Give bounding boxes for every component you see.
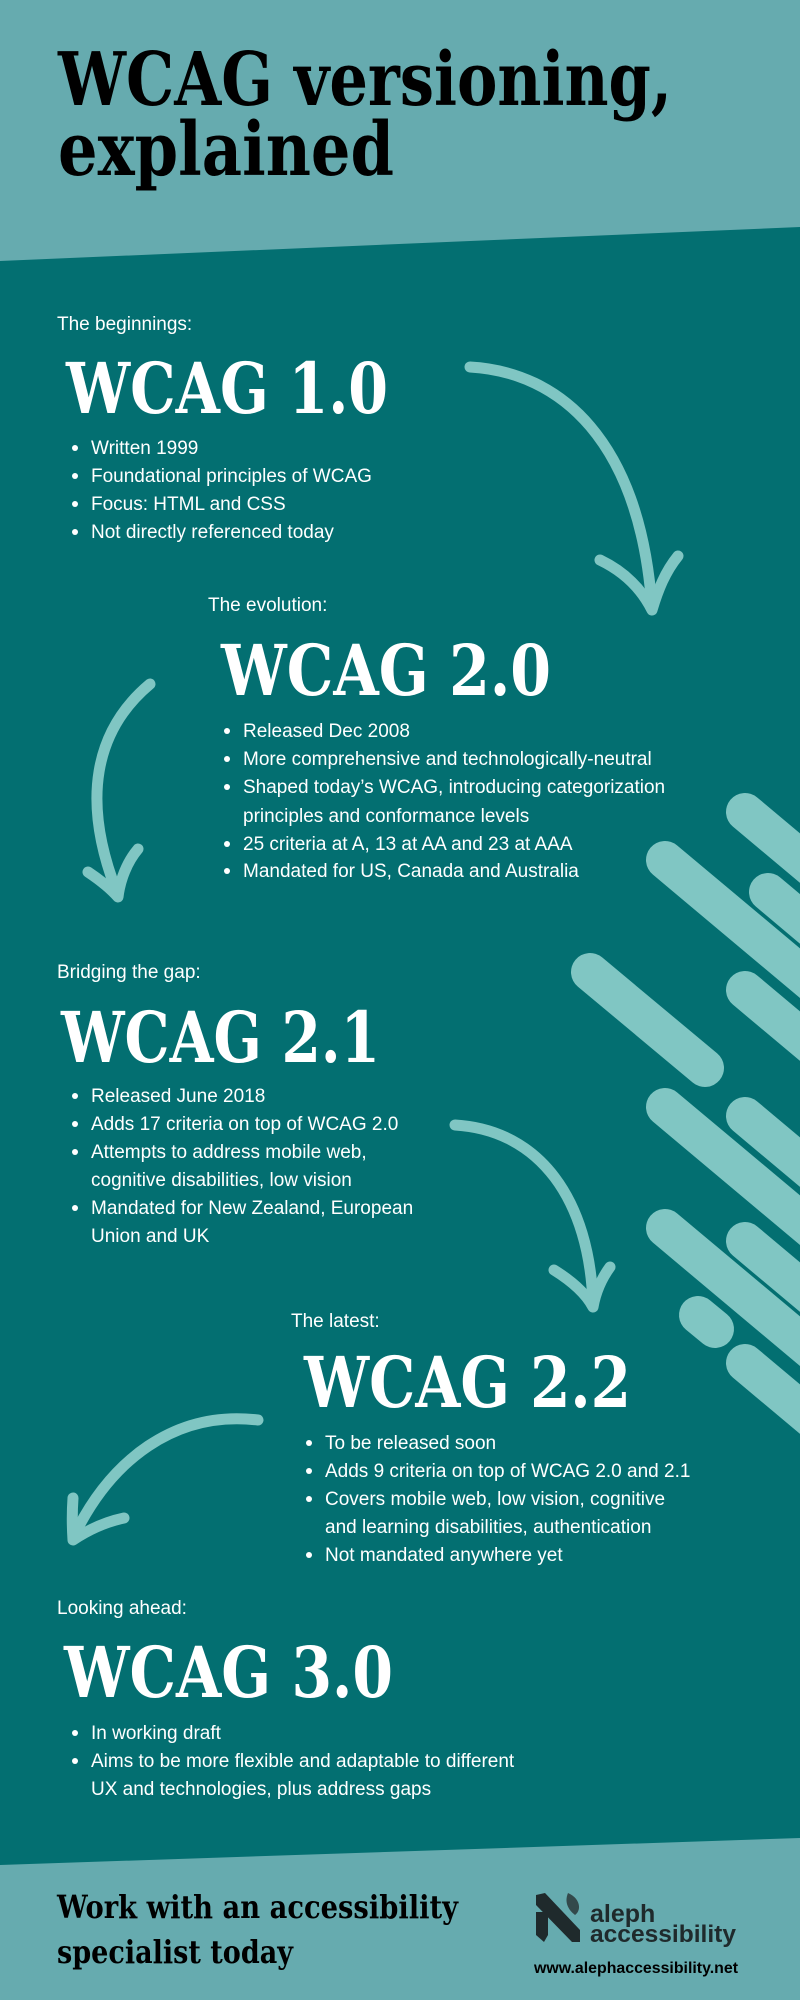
section: WCAG 2.2: WCAG 2.2 [303,1341,631,1424]
section: WCAG 2.2: The latest: [291,1311,380,1332]
section: WCAG 2.1: WCAG 2.1 [60,996,380,1079]
section: WCAG 2.0: More comprehensive and technologically-neutral [243,749,652,770]
section: WCAG 3.0: Aims to be more flexible and adaptable to different [91,1751,515,1772]
section: WCAG 2.0: principles and conformance levels [243,806,529,827]
section: WCAG 2.0: Released Dec 2008 [243,721,410,742]
arrow: 2.1 to 2.2 [455,1125,610,1307]
section: WCAG 2.0 [208,595,665,882]
logo [533,1893,739,1977]
section: WCAG 2.1: Mandated for New Zealand, European [91,1198,413,1219]
section: WCAG 2.1: Adds 17 criteria on top of WCAG 2.0 [91,1114,398,1135]
section: WCAG 2.1: cognitive disabilities, low vision [91,1170,352,1191]
footer band [0,1838,800,2000]
decorative stripes [590,812,800,1493]
section: WCAG 2.2: and learning disabilities, authentication [325,1517,651,1538]
section: WCAG 2.2: Not mandated anywhere yet [325,1545,563,1566]
section: WCAG 2.1: Released June 2018 [91,1086,265,1107]
section: WCAG 1.0: Foundational principles of WCAG [91,466,372,487]
icon: aleph mark [536,1893,580,1942]
arrow: 2.2 to 3.0 [72,1419,258,1540]
title: WCAG versioning, [57,37,672,123]
section: WCAG 1.0: The beginnings: [57,314,192,335]
section: WCAG 3.0 [57,1598,515,1800]
logo: aleph [590,1900,655,1928]
footer call to action [56,1888,459,1971]
section: WCAG 2.0: Mandated for US, Canada and Australia [243,861,579,882]
section: WCAG 2.0: Shaped today’s WCAG, introducing categorization [243,777,665,798]
section: WCAG 1.0: Written 1999 [91,438,198,459]
section: WCAG 2.1: Attempts to address mobile web, [91,1142,367,1163]
section: WCAG 2.2: Covers mobile web, low vision, cognitive [325,1489,665,1510]
section: WCAG 1.0 [57,314,388,543]
footer call to action: Work with an accessibility [56,1888,459,1926]
footer call to action: specialist today [57,1933,294,1971]
section: WCAG 2.1: Bridging the gap: [57,962,201,983]
section: WCAG 1.0: Focus: HTML and CSS [91,494,286,515]
section: WCAG 1.0: Not directly referenced today [91,522,334,543]
section: WCAG 1.0: WCAG 1.0 [65,347,388,430]
arrow: 2.0 to 2.1 [88,684,150,897]
section: WCAG 2.0: The evolution: [208,595,327,616]
section: WCAG 2.2: To be released soon [325,1433,496,1454]
arrow: 1.0 to 2.0 [470,367,678,610]
section: WCAG 3.0: Looking ahead: [57,1598,187,1619]
section: WCAG 3.0: WCAG 3.0 [63,1631,393,1714]
section: WCAG 2.1 [57,962,413,1247]
section: WCAG 3.0: UX and technologies, plus address gaps [91,1779,431,1800]
url: www.alephaccessibility.net [533,1960,739,1977]
section: WCAG 2.0: 25 criteria at A, 13 at AA and 23 at AAA [243,834,573,855]
logo: accessibility [590,1921,737,1948]
section: WCAG 2.2 [291,1311,690,1566]
section: WCAG 2.0: WCAG 2.0 [220,629,551,712]
title: explained [58,107,394,193]
section: WCAG 2.2: Adds 9 criteria on top of WCAG 2.0 and 2.1 [325,1461,690,1482]
title [57,37,672,193]
section: WCAG 2.1: Union and UK [91,1226,210,1247]
header band [0,0,800,261]
section: WCAG 3.0: In working draft [91,1723,222,1744]
